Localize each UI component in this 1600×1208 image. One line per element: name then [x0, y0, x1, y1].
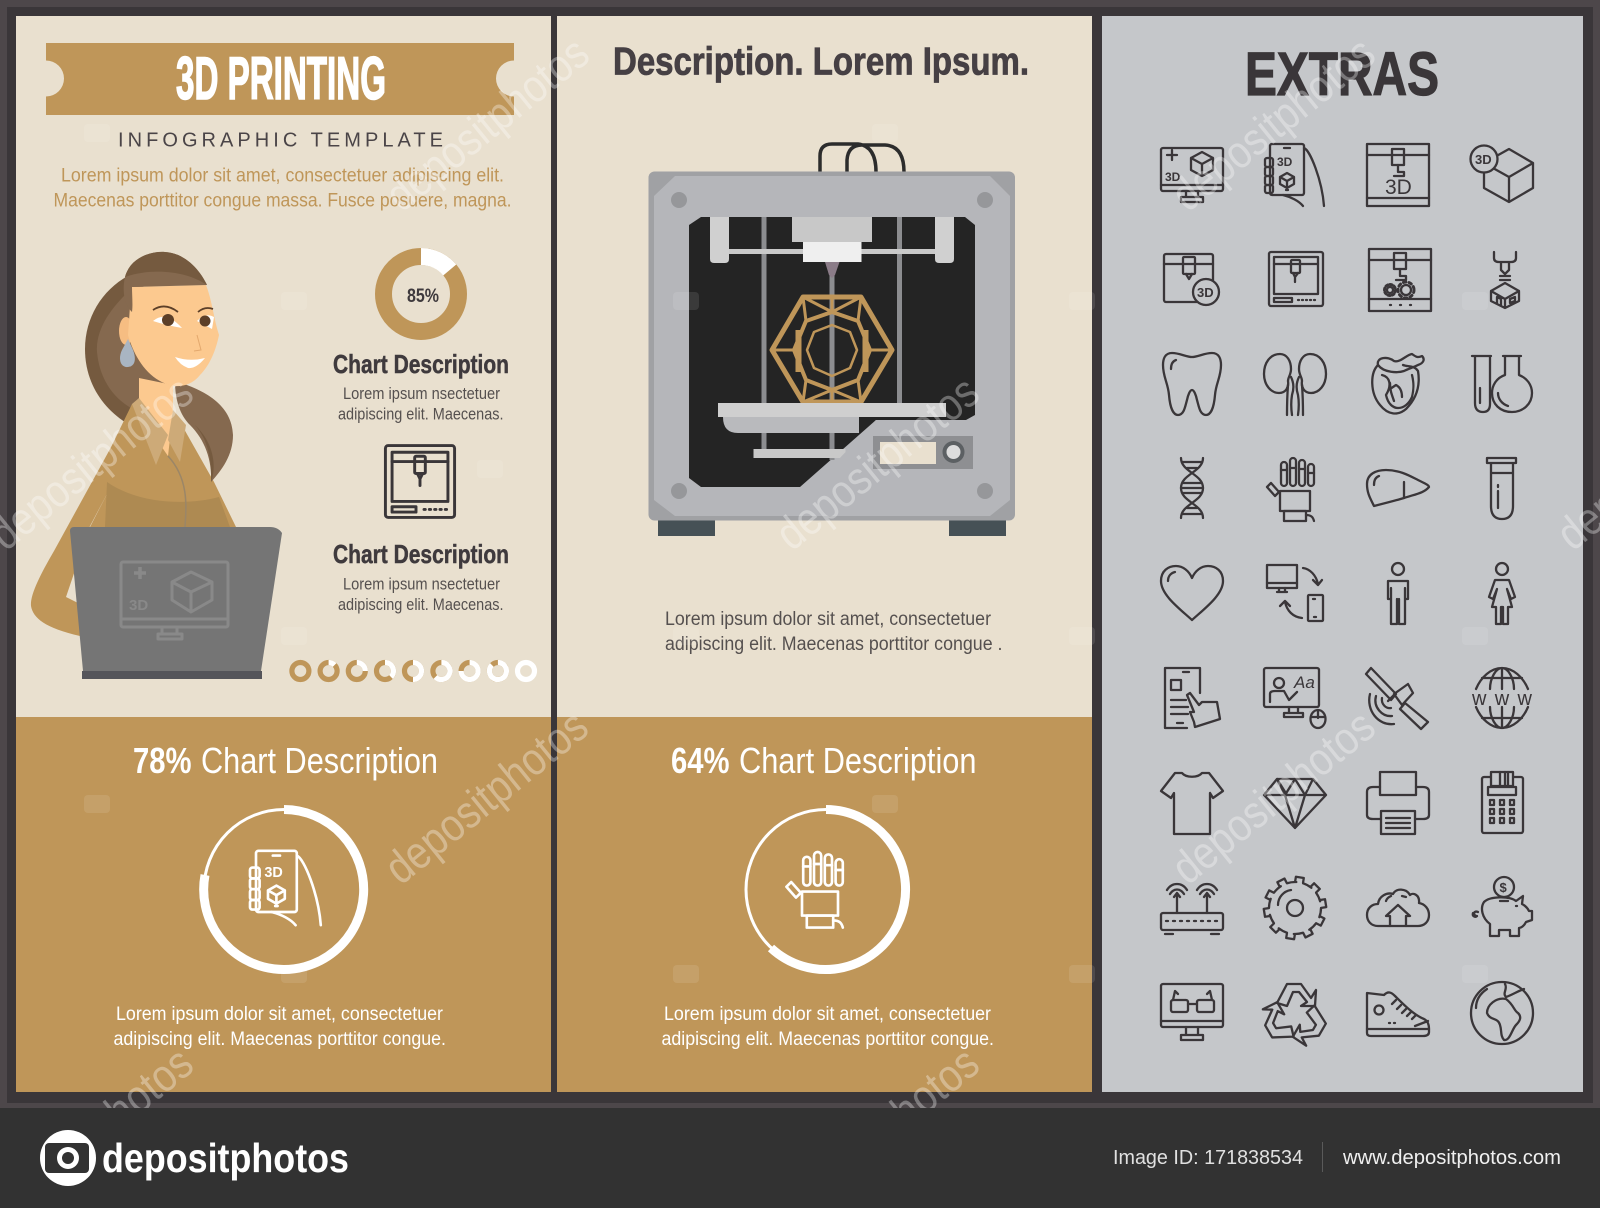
image id: Image ID: 171838534 [1113, 1147, 1303, 1169]
stat heading 78% [133, 740, 438, 781]
text block lower middle [662, 1004, 994, 1050]
watermark: depositphotos: depositphotos [765, 365, 988, 560]
icon: printer gears [1369, 249, 1431, 311]
woman illustration with laptop [31, 252, 282, 679]
icon: 3d cube [1470, 146, 1533, 202]
text block: adipiscing elit. Maecenas porttitor congue . [665, 634, 1002, 655]
icon: kidneys [1264, 354, 1326, 415]
text block lower middle: adipiscing elit. Maecenas porttitor congue. [662, 1029, 994, 1050]
icon: devices sync [1267, 565, 1323, 621]
extras heading: EXTRAS [1245, 40, 1439, 108]
chart description 1: adipiscing elit. Maecenas. [338, 404, 504, 424]
laptop [70, 527, 282, 679]
icon: man [1388, 563, 1408, 624]
logo: depositphotos [40, 1130, 349, 1186]
icon: monitor 3d: 3D [1165, 170, 1181, 184]
icon grid [1161, 144, 1533, 1049]
ring chart 64% with robot hand icon [746, 810, 906, 970]
icon: anatomical heart [1372, 354, 1424, 414]
text block: Lorem ipsum dolor sit amet, consectetuer [665, 609, 992, 630]
intro text: Maecenas porttitor congue massa. Fusce posuere, magna. [54, 190, 512, 212]
icon: tooth [1163, 353, 1221, 415]
title banner: 3D PRINTING [176, 45, 386, 112]
text block lower middle: Lorem ipsum dolor sit amet, consectetuer [664, 1004, 992, 1025]
icon: piggy bank: $ [1500, 880, 1508, 895]
intro text: Lorem ipsum dolor sit amet, consectetuer adipiscing elit. [61, 166, 504, 186]
watermark: depositphotos: depositphotos [1161, 699, 1384, 894]
chart description 2: Lorem ipsum nsectetuer [343, 574, 500, 594]
icon: t-shirt [1161, 773, 1223, 834]
progress donuts row [292, 662, 534, 680]
icon: monitor with person and Aa: Aa [1293, 673, 1315, 692]
panel: left column [16, 16, 551, 1092]
icon: recycle [1258, 984, 1331, 1049]
panel: middle column [557, 16, 1092, 1092]
icon: printer badge 3d: 3D [1197, 285, 1214, 300]
chart description 1 [333, 349, 509, 424]
icon: heart [1161, 566, 1223, 620]
icon: diamond [1264, 779, 1326, 828]
icon: www globe [1471, 668, 1533, 728]
icon: calculator terminal [1482, 772, 1523, 833]
watermark: depositphotos: depositphotos [375, 26, 598, 221]
stat heading 64% [671, 740, 976, 781]
ring chart 78% with phone icon: 3D [264, 865, 283, 881]
icon: printer [1367, 772, 1429, 834]
stat heading 64%: 64% [671, 740, 730, 781]
laptop: 3D [129, 597, 148, 614]
icon: satellite [1366, 668, 1428, 729]
ring chart 78% with phone icon [204, 810, 364, 970]
watermark: camera marks [84, 124, 1488, 983]
panel: extras [1102, 16, 1583, 1092]
icon: nozzle and house [1491, 252, 1519, 308]
icon: test tube and flask [1472, 356, 1532, 412]
icon: monitor 3d [1161, 148, 1223, 202]
icon: www globe: www [1471, 688, 1533, 710]
donut chart 85% [384, 256, 458, 332]
chart description 2 [333, 539, 509, 614]
icon: printer 3d text: 3D [1385, 176, 1412, 199]
text block lower left: Lorem ipsum dolor sit amet, consectetuer [116, 1004, 444, 1025]
chart description 2: Chart Description [333, 539, 509, 569]
stat heading 78%: 78% [133, 740, 192, 781]
3d printer illustration [648, 144, 1015, 536]
icon: cloud upload [1367, 890, 1429, 926]
icon: router [1161, 884, 1223, 934]
watermark: depositphotos: depositphotos [1161, 26, 1384, 221]
icon: test tube [1487, 458, 1516, 519]
text block lower left: adipiscing elit. Maecenas porttitor congue. [114, 1029, 446, 1050]
icon: framed printer [1269, 252, 1323, 306]
icon: phone in hand: 3D [1277, 155, 1293, 169]
icon: monitor glasses [1161, 984, 1223, 1040]
watermark: depositphotos: depositphotos [374, 699, 597, 894]
icon: 3d cube: 3D [1475, 152, 1492, 167]
icon: phone in hand [1265, 144, 1324, 206]
icon: earth globe [1471, 982, 1533, 1044]
icon: piggy bank [1473, 877, 1532, 936]
logo: depositphotos: depositphotos [102, 1135, 349, 1181]
icon: dna [1181, 458, 1203, 518]
icon: printer 3d text [1367, 144, 1429, 206]
text block lower left [114, 1004, 446, 1050]
icon: robot hand [1267, 458, 1314, 521]
donut chart 85%: 85% [407, 286, 439, 307]
text block [665, 609, 1002, 655]
website: www.depositphotos.com [1342, 1147, 1561, 1169]
printed gem [772, 296, 892, 403]
chart description 1: Chart Description [333, 349, 509, 379]
footer bar [0, 1108, 1600, 1208]
title banner [46, 43, 514, 115]
icon: monitor with person and Aa [1264, 668, 1326, 728]
heading: Description. Lorem Ipsum. [613, 40, 1029, 84]
icon: 3d printer [385, 446, 455, 517]
icon: woman [1489, 563, 1515, 624]
chart description 1: Lorem ipsum nsectetuer [343, 384, 500, 403]
subtitle: INFOGRAPHIC TEMPLATE [118, 130, 443, 152]
icon: sneaker [1367, 992, 1429, 1036]
icon: gear [1264, 877, 1326, 939]
stat heading 64%: Chart Description [739, 740, 976, 781]
stat heading 78%: Chart Description [201, 740, 438, 781]
icon: printer badge 3d [1164, 254, 1219, 305]
chart description 2: adipiscing elit. Maecenas. [338, 595, 504, 614]
intro text [54, 166, 512, 212]
icon: liver [1367, 470, 1429, 506]
icon: phone with pointer [1165, 668, 1220, 728]
